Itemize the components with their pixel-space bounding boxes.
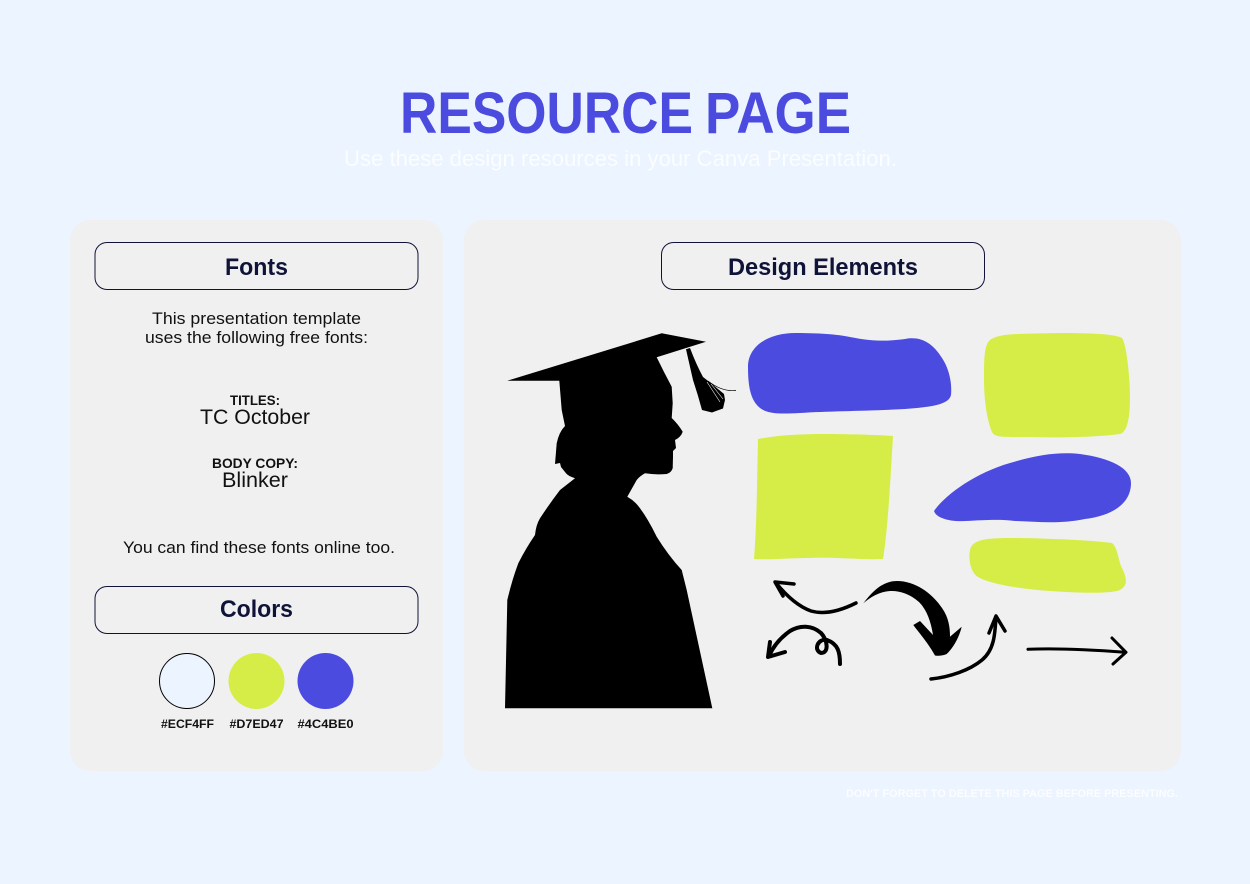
shape: lime bar: [969, 538, 1126, 593]
heading: fonts: Fonts: [225, 254, 288, 281]
text block: fonts note: You can find these fonts online too.: [123, 538, 395, 557]
text block: title font: TITLES:: [230, 392, 280, 408]
title: PAGE: [705, 81, 851, 146]
heading: design elements: [662, 242, 984, 290]
shape: lime square: [754, 434, 893, 559]
heading: fonts: [95, 242, 418, 290]
icon: cap tassel: [686, 348, 736, 412]
arrow: bold curved down: [863, 581, 962, 656]
shape: indigo blob right: [934, 453, 1131, 522]
title: RESOURCE: [400, 81, 693, 146]
text block: title font: [200, 392, 310, 429]
text block: fonts intro: [145, 309, 368, 347]
text block: body font: Blinker: [222, 469, 288, 492]
text block: title font: TC October: [200, 406, 310, 429]
heading: colors: Colors: [220, 596, 293, 623]
swatch: pale blue: [160, 654, 214, 731]
swatch: indigo: #4C4BE0: [298, 717, 354, 731]
arrow: curved left: [775, 582, 856, 613]
panel: design elements: [464, 220, 1181, 771]
swatch: pale blue: #ECF4FF: [161, 717, 214, 731]
arrow: looped left: [768, 627, 840, 664]
panel: fonts and colors: [70, 220, 443, 771]
footer note: DON'T FORGET TO DELETE THIS PAGE BEFORE PRESENTING.: [846, 788, 1178, 800]
text block: body font: BODY COPY:: [212, 455, 298, 471]
shape: indigo blob top: [748, 333, 951, 413]
icon: graduate silhouette: [505, 333, 736, 708]
swatch: lime: #D7ED47: [230, 717, 284, 731]
heading: colors: [95, 586, 418, 634]
arrow: straight right: [1028, 638, 1126, 664]
text block: fonts intro: uses the following free fonts:: [145, 328, 368, 347]
subtitle: Use these design resources in your Canva Presentation.: [344, 146, 897, 171]
swatch: lime: [228, 653, 284, 731]
text block: body font: [212, 455, 298, 492]
swatch: indigo: [298, 653, 354, 731]
shape: lime blob top right: [984, 333, 1130, 437]
arrow: curved up: [931, 616, 1005, 679]
heading: design elements: Design Elements: [728, 254, 918, 281]
text block: fonts intro: This presentation template: [152, 309, 361, 328]
